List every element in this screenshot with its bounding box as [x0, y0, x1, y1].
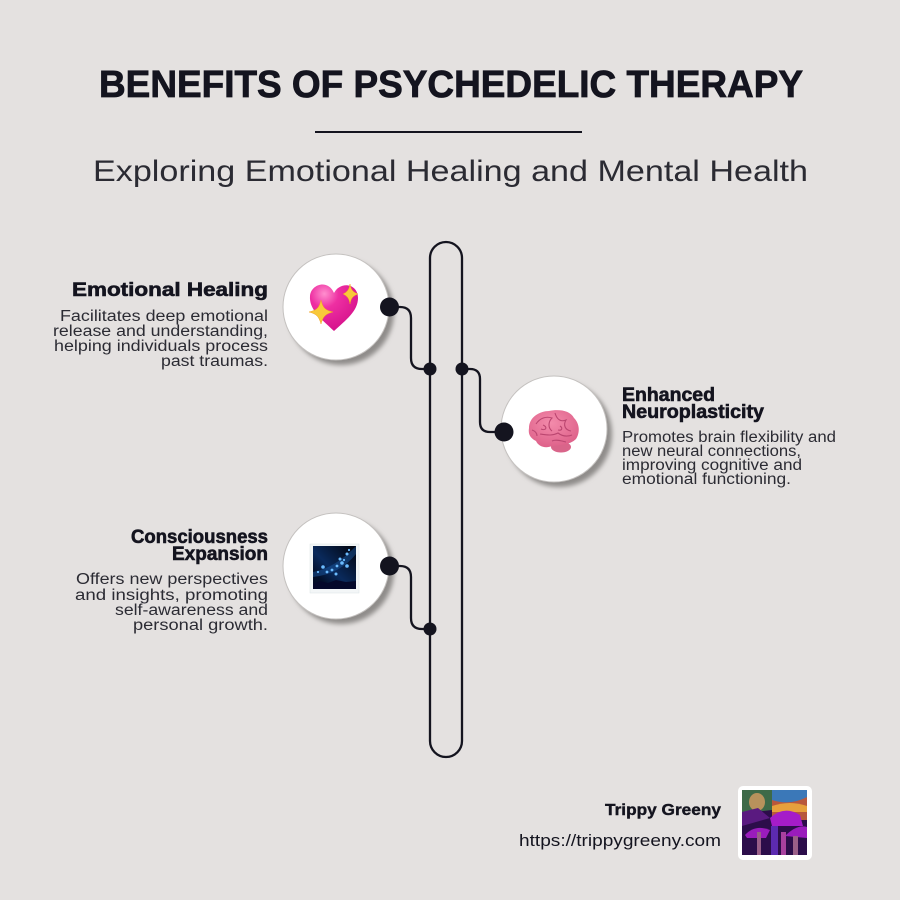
text: neuroplasticity description: Promotes brain flexibility and [622, 429, 836, 446]
text: consciousness description: self-awareness and [115, 602, 268, 619]
panel: emotional healing [53, 254, 436, 376]
text: emotional healing description [53, 308, 268, 370]
heading: consciousness expansion: Consciousness [131, 527, 268, 548]
text: consciousness description: and insights, promoting [75, 587, 268, 604]
heading: enhanced neuroplasticity: Neuroplasticity [622, 402, 764, 423]
galaxy icon circle [283, 513, 394, 624]
connector: consciousness expansion [380, 556, 436, 636]
title: BENEFITS OF PSYCHEDELIC THERAPY [99, 64, 803, 106]
icon: sparkling heart [309, 284, 358, 331]
text: emotional healing description: past traumas. [161, 353, 268, 370]
text: neuroplasticity description [622, 429, 836, 488]
icon: milky way [310, 544, 359, 593]
connector: enhanced neuroplasticity [456, 362, 514, 442]
text: neuroplasticity description: new neural connections, [622, 443, 801, 460]
heading: consciousness expansion [131, 527, 268, 565]
heading: enhanced neuroplasticity [622, 385, 764, 423]
panel: enhanced neuroplasticity [456, 362, 836, 488]
heart icon circle [283, 254, 394, 365]
text: emotional healing description: helping individuals process [54, 338, 268, 355]
title divider [315, 131, 582, 133]
heading: consciousness expansion: Expansion [172, 544, 268, 565]
connector: emotional healing [380, 298, 436, 376]
text: consciousness description: Offers new perspectives [76, 571, 268, 588]
text: neuroplasticity description: improving cognitive and [622, 457, 802, 474]
brain icon circle [501, 376, 612, 487]
text: emotional healing description: release and understanding, [53, 323, 268, 340]
text: consciousness description [75, 571, 268, 634]
text: consciousness description: personal growth. [133, 617, 268, 634]
central pill timeline [430, 242, 462, 757]
subtitle: Exploring Emotional Healing and Mental Health [93, 155, 808, 188]
heading: emotional healing: Emotional Healing [72, 280, 268, 301]
text: neuroplasticity description: emotional functioning. [622, 471, 791, 488]
footer url: https://trippygreeny.com [519, 831, 721, 850]
footer logo image [738, 786, 812, 860]
icon: brain [529, 410, 579, 452]
text: emotional healing description: Facilitates deep emotional [60, 308, 268, 325]
panel: consciousness expansion [75, 513, 436, 636]
heading: enhanced neuroplasticity: Enhanced [622, 385, 715, 406]
footer brand name: Trippy Greeny [605, 802, 721, 819]
